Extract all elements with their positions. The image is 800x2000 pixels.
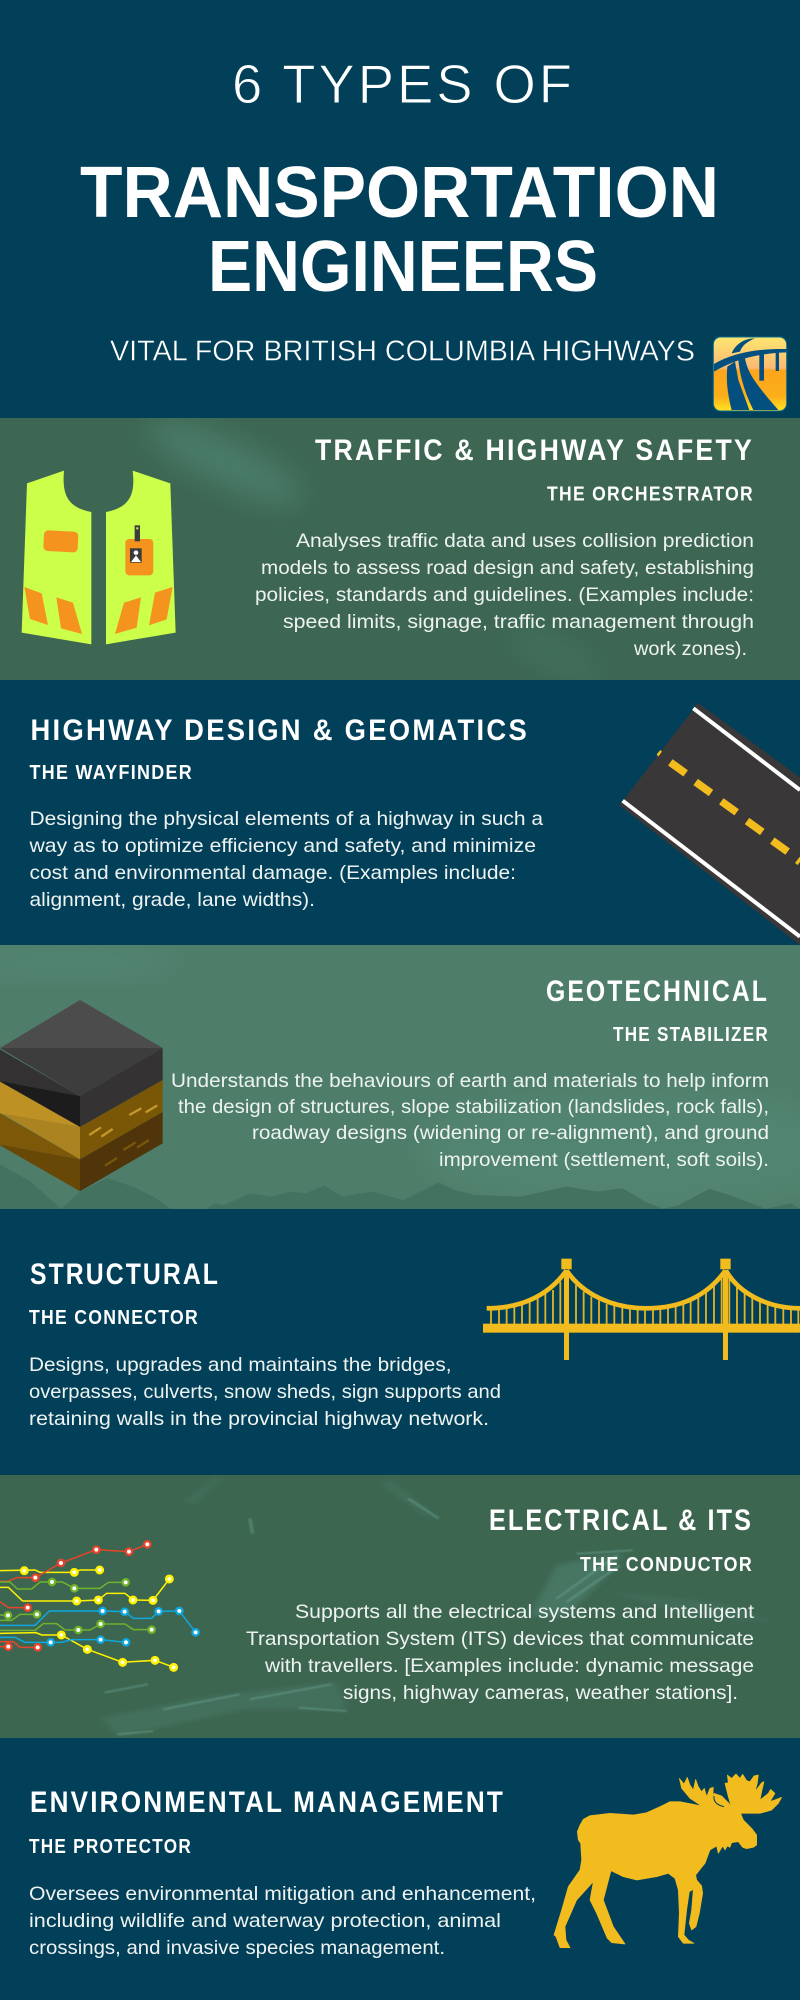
icon: soil layers [0, 1000, 163, 1191]
panel: highway design and geomatics [0, 680, 800, 945]
description: alignment, grade, lane widths). [30, 889, 315, 911]
description: crossings, and invasive species management. [29, 1937, 445, 1959]
panel: electrical and ITS [0, 1475, 800, 1738]
description: way as to optimize efficiency and safety, and minimize [28, 835, 536, 857]
subtitle: VITAL FOR BRITISH COLUMBIA HIGHWAYS [110, 336, 695, 368]
heading: TRAFFIC & HIGHWAY SAFETY [315, 434, 754, 467]
subheading: THE CONDUCTOR [580, 1553, 753, 1576]
subheading: THE WAYFINDER [30, 761, 193, 784]
panel: header [0, 0, 800, 418]
icon: highway logo [713, 337, 787, 411]
description: Designing the physical elements of a highway in such a [30, 808, 543, 830]
description: including wildlife and waterway protection, animal [29, 1910, 501, 1932]
description: Oversees environmental mitigation and enhancement, [29, 1883, 536, 1905]
description [255, 530, 754, 660]
title line: transportation: TRANSPORTATION [80, 153, 719, 233]
description: Analyses traffic data and uses collision prediction [296, 530, 754, 552]
description: Supports all the electrical systems and Intelligent [295, 1601, 755, 1623]
description: Transportation System (ITS) devices that communicate [246, 1628, 754, 1650]
title line: engineers: ENGINEERS [208, 227, 598, 307]
subheading: THE CONNECTOR [29, 1306, 199, 1329]
description: the design of structures, slope stabilization (landslides, rock falls), [178, 1096, 769, 1118]
icon: safety vest [22, 471, 176, 644]
description: retaining walls in the provincial highway network. [29, 1408, 489, 1430]
description [246, 1601, 755, 1704]
description [28, 808, 543, 911]
panel: environmental management [0, 1738, 800, 2000]
panel: structural [0, 1209, 800, 1475]
panel: geotechnical [0, 945, 800, 1212]
description: Designs, upgrades and maintains the bridges, [29, 1354, 452, 1376]
subheading: THE ORCHESTRATOR [547, 482, 754, 506]
title line: 6 types of: 6 TYPES OF [232, 53, 575, 115]
description: work zones). [633, 638, 747, 660]
description [171, 1070, 769, 1171]
description: models to assess road design and safety, establishing [261, 557, 754, 579]
description: Understands the behaviours of earth and materials to help inform [171, 1070, 769, 1092]
icon: suspension bridge [483, 1259, 800, 1360]
heading: ENVIRONMENTAL MANAGEMENT [30, 1786, 505, 1819]
description: improvement (settlement, soft soils). [439, 1149, 769, 1171]
subheading: THE PROTECTOR [29, 1835, 192, 1858]
heading: ELECTRICAL & ITS [489, 1504, 753, 1537]
description [29, 1354, 501, 1430]
icon: moose [554, 1774, 782, 1948]
description: signs, highway cameras, weather stations]. [343, 1682, 738, 1704]
subheading: THE STABILIZER [613, 1023, 769, 1046]
description: overpasses, culverts, snow sheds, sign supports and [29, 1381, 501, 1403]
mountains [0, 1165, 800, 1212]
description: policies, standards and guidelines. (Examples include: [255, 584, 754, 606]
panel: traffic and highway safety [0, 405, 800, 692]
description [29, 1883, 536, 1959]
icon: road [619, 703, 800, 945]
description: with travellers. [Examples include: dynamic message [264, 1655, 754, 1677]
description: roadway designs (widening or re-alignment), and ground [252, 1122, 769, 1144]
heading: HIGHWAY DESIGN & GEOMATICS [30, 714, 529, 747]
description: cost and environmental damage. (Examples include: [30, 862, 516, 884]
heading: STRUCTURAL [30, 1258, 220, 1291]
icon: circuit network [0, 1541, 199, 1670]
description: speed limits, signage, traffic management through [283, 611, 754, 633]
